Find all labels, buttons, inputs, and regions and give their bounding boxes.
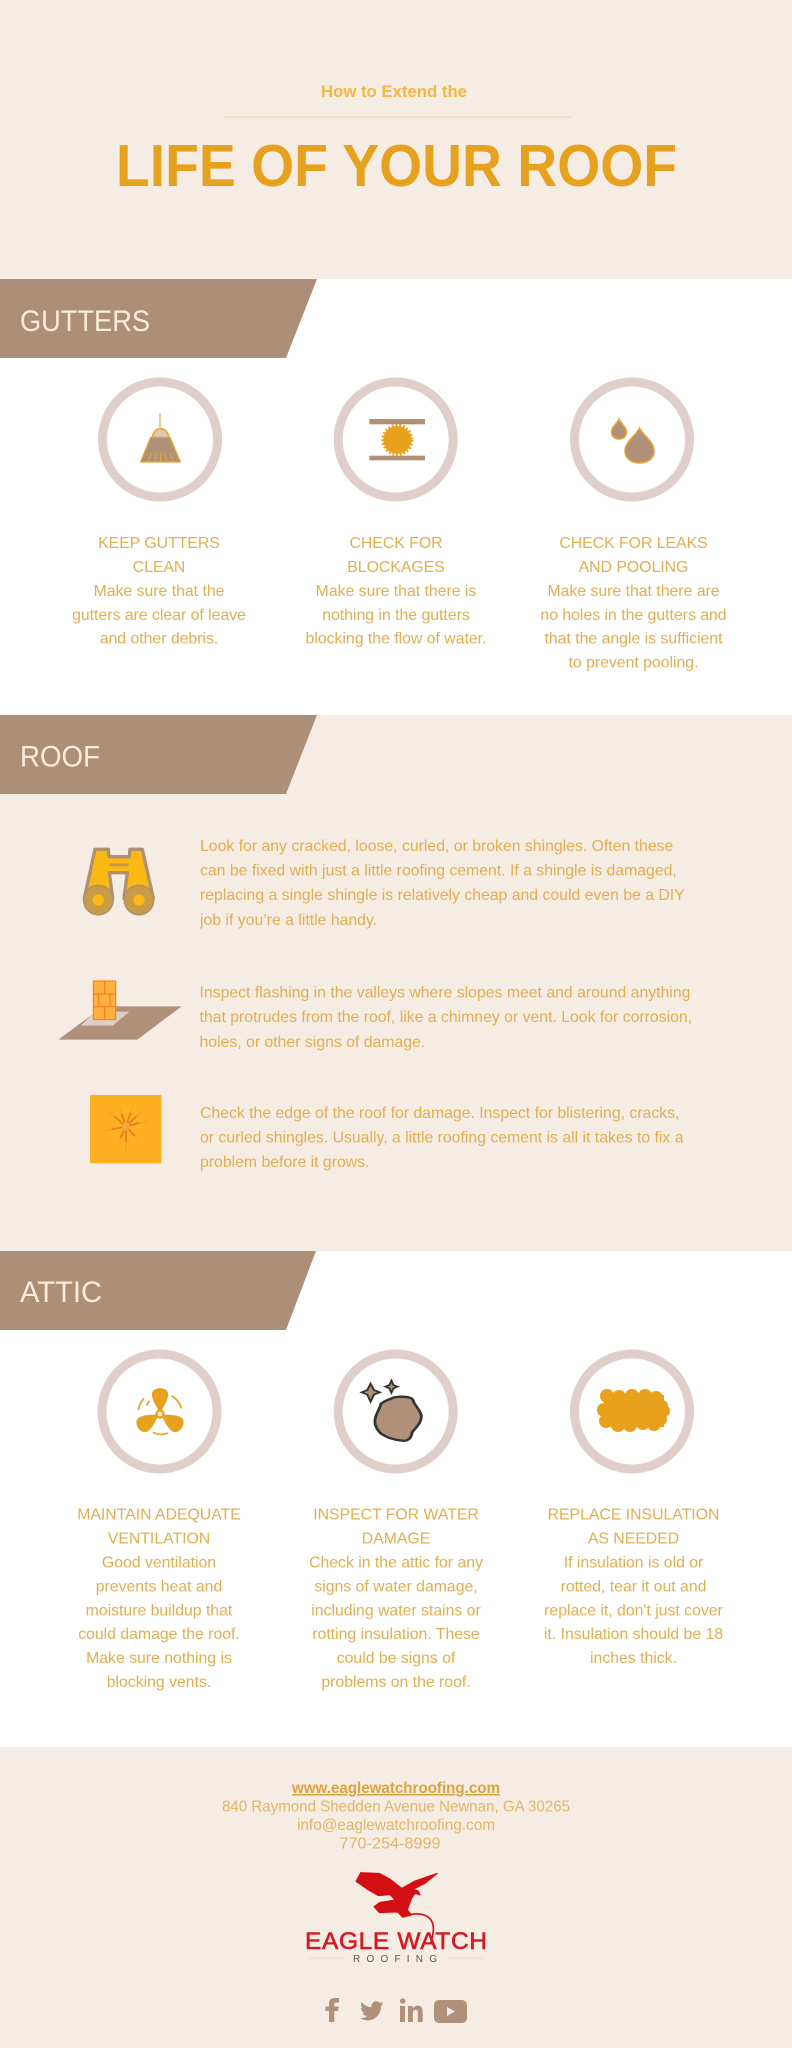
text: ventilation: Good ventilation xyxy=(102,1554,216,1572)
text: check for blockages: CHECK FOR xyxy=(349,535,443,552)
icon: gear blockage xyxy=(369,419,425,460)
contact details: www.eaglewatchroofing.com xyxy=(291,1780,500,1797)
text: shingles: Look for any cracked, loose, curled, or broken shingles. Often these xyxy=(200,838,674,855)
icon: twitter xyxy=(360,2001,384,2020)
text: check for leaks and pooling xyxy=(540,535,727,671)
item: check for leaks and pooling xyxy=(540,382,727,671)
text: roof edge: problem before it grows. xyxy=(200,1154,369,1171)
icon: water stain xyxy=(362,1381,421,1441)
text: shingles xyxy=(199,838,685,929)
text: water damage: Check in the attic for any xyxy=(309,1554,483,1572)
text: water damage: could be signs of xyxy=(337,1650,456,1667)
text: water damage: including water stains or xyxy=(311,1602,481,1620)
text: ventilation: moisture buildup that xyxy=(86,1602,233,1620)
text: keep gutters clean: gutters are clear of leave xyxy=(72,607,246,624)
icon: insulation xyxy=(597,1389,670,1432)
text: flashing: that protrudes from the roof, like a chimney or vent. Look for corrosion, xyxy=(200,1009,692,1026)
icon: chimney on roof xyxy=(58,981,182,1040)
text: roof edge: Check the edge of the roof for damage. Inspect for blistering, cracks, xyxy=(200,1105,679,1122)
text: ventilation: VENTILATION xyxy=(108,1530,210,1548)
text: check for blockages: blocking the flow of water. xyxy=(306,630,486,647)
text: water damage: signs of water damage, xyxy=(314,1578,478,1596)
section banner: gutters: GUTTERS xyxy=(20,305,150,338)
logo: Eagle Watch Roofing xyxy=(305,1873,487,1965)
section banner: roof: ROOF xyxy=(20,740,100,774)
text: check for leaks and pooling: that the angle is sufficient xyxy=(545,630,723,647)
icon: binoculars xyxy=(84,849,154,915)
icon: broom xyxy=(141,413,180,462)
section banner: attic: ATTIC xyxy=(20,1276,102,1309)
text: flashing xyxy=(200,984,692,1051)
text: check for leaks and pooling: Make sure that there are xyxy=(547,583,720,600)
text: insulation: rotted, tear it out and xyxy=(561,1578,706,1596)
panel: roof xyxy=(0,715,792,1251)
text: check for leaks and pooling: CHECK FOR LEAKS xyxy=(559,535,708,552)
text: flashing: Inspect flashing in the valleys where slopes meet and around anything xyxy=(200,984,690,1002)
item: ventilation xyxy=(77,1354,241,1691)
logo: Eagle Watch Roofing: ROOFING xyxy=(353,1954,437,1965)
panel: attic xyxy=(0,1251,792,1747)
text: keep gutters clean: Make sure that the xyxy=(94,583,225,600)
item: keep gutters clean xyxy=(72,382,246,647)
text: insulation: it. Insulation should be 18 xyxy=(544,1626,723,1643)
text: ventilation: could damage the roof. xyxy=(78,1626,240,1643)
text: roof edge xyxy=(200,1105,684,1171)
text: insulation: inches thick. xyxy=(590,1650,677,1667)
icon: youtube xyxy=(434,2000,467,2023)
text: ventilation xyxy=(77,1506,241,1691)
section banner: roof xyxy=(0,715,317,794)
icon: linkedin xyxy=(400,1998,423,2022)
text: keep gutters clean: and other debris. xyxy=(100,630,218,647)
section banner: gutters xyxy=(0,279,317,358)
text: water damage: rotting insulation. These xyxy=(312,1626,480,1643)
text: water damage: INSPECT FOR WATER xyxy=(313,1506,479,1524)
text: keep gutters clean xyxy=(72,535,246,647)
text: water damage xyxy=(309,1506,483,1691)
text: shingles: replacing a single shingle is relatively cheap and could even be a DIY xyxy=(200,887,685,904)
text: insulation xyxy=(544,1506,723,1667)
section banner: attic xyxy=(0,1251,316,1330)
text: insulation: AS NEEDED xyxy=(588,1530,679,1548)
contact details: info@eaglewatchroofing.com xyxy=(297,1817,495,1834)
text: keep gutters clean: KEEP GUTTERS xyxy=(98,535,220,552)
icon: cracked shingle xyxy=(90,1095,161,1163)
item: check for blockages xyxy=(306,382,486,647)
panel: gutters xyxy=(0,279,792,715)
text: check for blockages: nothing in the gutters xyxy=(322,607,470,624)
text: check for leaks and pooling: no holes in the gutters and xyxy=(540,607,727,624)
text: ventilation: blocking vents. xyxy=(107,1674,211,1691)
text: keep gutters clean: CLEAN xyxy=(133,559,185,576)
text: insulation: replace it, don't just cover xyxy=(544,1602,723,1620)
text: water damage: problems on the roof. xyxy=(321,1674,471,1691)
social icons xyxy=(326,1998,467,2023)
text: check for blockages xyxy=(306,535,486,647)
text: ventilation: Make sure nothing is xyxy=(86,1650,232,1667)
text: shingles: job if you’re a little handy. xyxy=(199,912,377,929)
item: water damage xyxy=(309,1354,483,1691)
text: flashing: holes, or other signs of damage. xyxy=(200,1034,425,1051)
panel: header xyxy=(0,0,792,279)
contact details: 770-254-8999 xyxy=(340,1836,440,1852)
text: insulation: If insulation is old or xyxy=(564,1554,703,1572)
text: insulation: REPLACE INSULATION xyxy=(548,1506,719,1524)
title: LIFE OF YOUR ROOF xyxy=(116,133,677,199)
text: ventilation: prevents heat and xyxy=(96,1578,222,1596)
text: ventilation: MAINTAIN ADEQUATE xyxy=(77,1506,241,1524)
icon: facebook xyxy=(326,1998,339,2022)
text: water damage: DAMAGE xyxy=(362,1530,430,1548)
text: roof edge: or curled shingles. Usually, a little roofing cement is all it takes to fix a xyxy=(200,1130,684,1146)
text: check for blockages: Make sure that there is xyxy=(316,583,476,600)
text: check for leaks and pooling: to prevent pooling. xyxy=(569,654,698,671)
item: insulation xyxy=(544,1354,723,1667)
panel: footer xyxy=(0,1747,792,2048)
contact details xyxy=(222,1780,570,1852)
contact details: 840 Raymond Shedden Avenue Newnan, GA 30265 xyxy=(222,1798,570,1816)
text: check for leaks and pooling: AND POOLING xyxy=(579,559,688,576)
text: shingles: can be fixed with just a little roofing cement. If a shingle is damaged, xyxy=(200,862,677,880)
text: check for blockages: BLOCKAGES xyxy=(347,559,445,576)
icon: water drops xyxy=(612,419,654,463)
logo: Eagle Watch Roofing: EAGLE WATCH xyxy=(305,1928,487,1955)
icon: fan xyxy=(134,1388,186,1435)
subtitle: How to Extend the xyxy=(321,82,467,101)
